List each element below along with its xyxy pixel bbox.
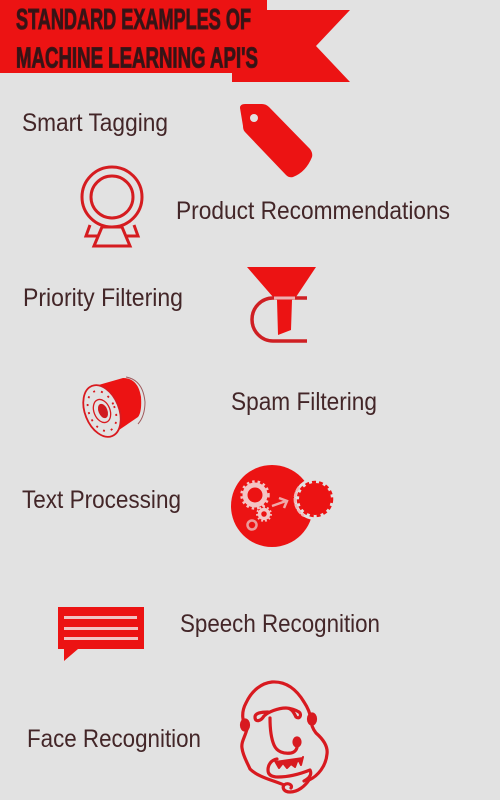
label: spam filtering: Spam Filtering — [231, 388, 377, 416]
icon: face line drawing — [242, 682, 327, 792]
title — [16, 4, 258, 74]
label: face recognition: Face Recognition — [27, 725, 201, 753]
title: STANDARD EXAMPLES OF — [16, 4, 251, 36]
filter face — [76, 380, 128, 442]
icon: award badge — [82, 167, 142, 246]
label: text processing: Text Processing — [22, 486, 181, 514]
title: MACHINE LEARNING API'S — [16, 42, 258, 74]
title banner — [0, 0, 350, 82]
label: speech recognition: Speech Recognition — [180, 610, 380, 638]
label: smart tagging: Smart Tagging — [22, 109, 168, 137]
icon: price tag — [240, 104, 312, 177]
icon: funnel — [247, 267, 316, 341]
icon: spam filter cylinder — [76, 377, 145, 442]
label: product recommendations: Product Recommendations — [176, 197, 450, 225]
icon: speech bubble — [58, 607, 144, 661]
icon: gears with arrow — [231, 465, 336, 547]
label: priority filtering: Priority Filtering — [23, 284, 183, 312]
